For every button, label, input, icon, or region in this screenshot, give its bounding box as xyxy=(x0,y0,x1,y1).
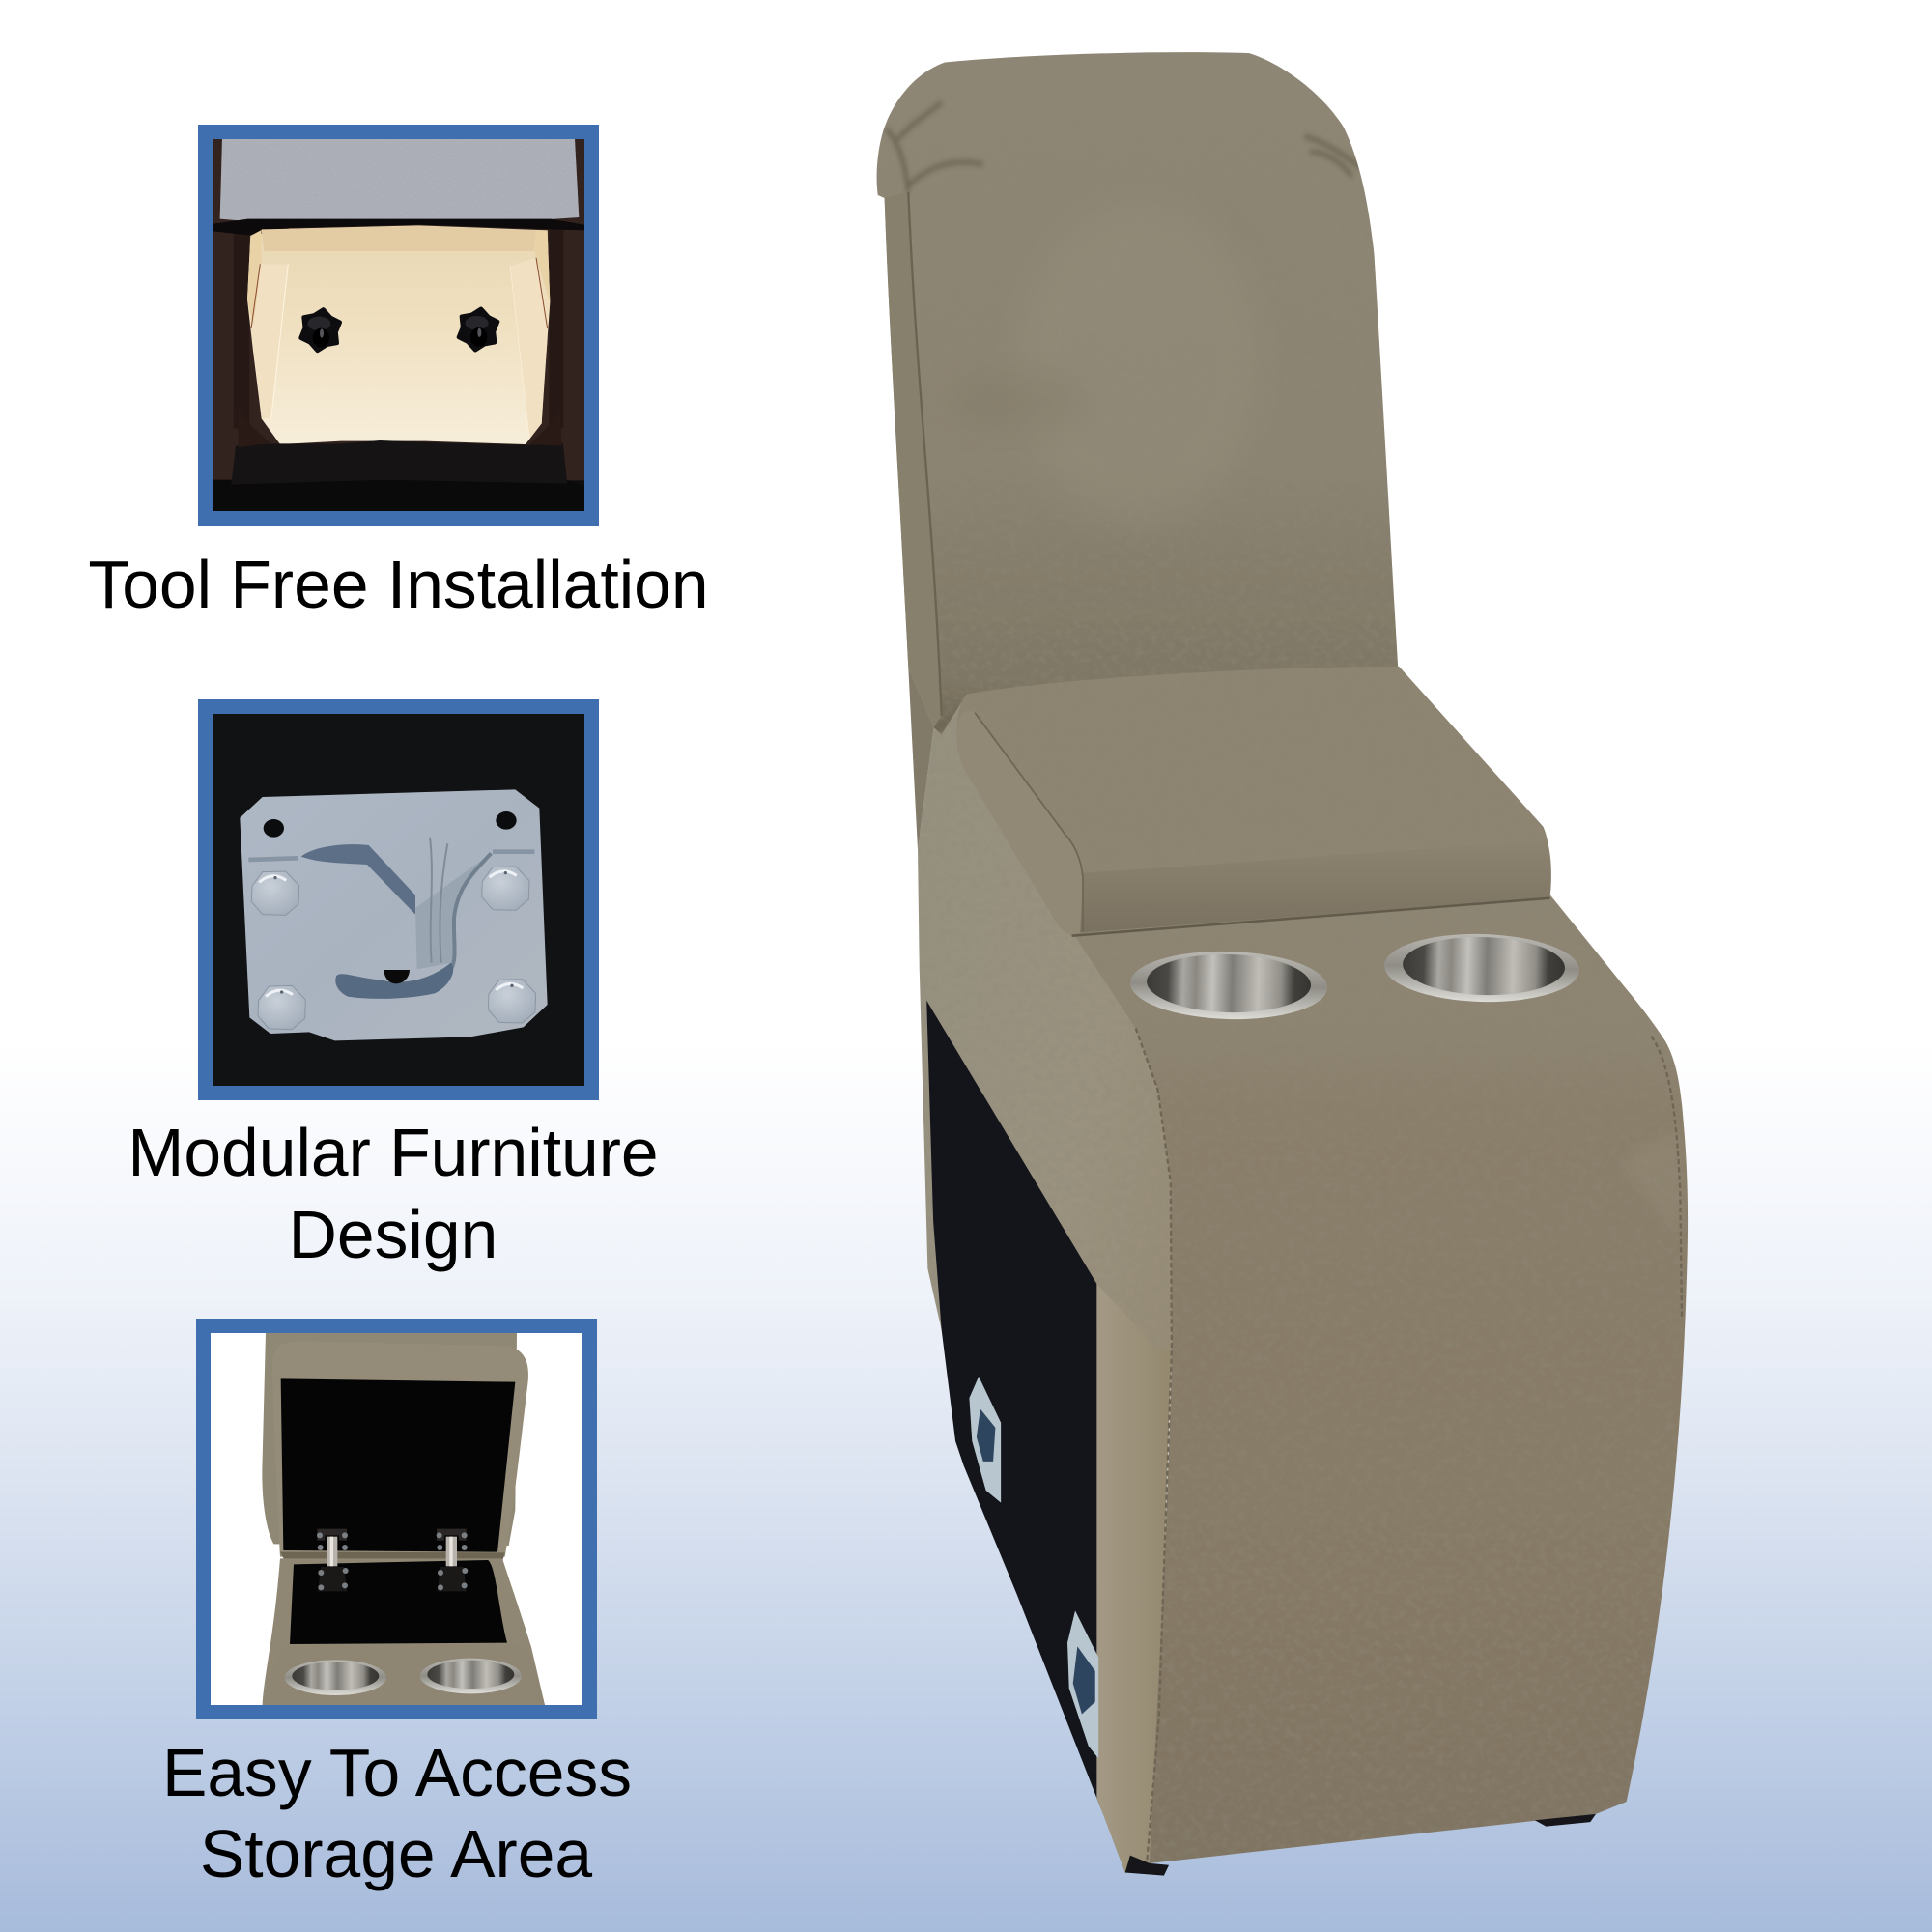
cup holder right xyxy=(1383,931,1580,1005)
panel: easy to access storage xyxy=(203,1325,589,1712)
chair side panel xyxy=(918,691,1172,1872)
photo: open storage compartment xyxy=(262,1333,545,1705)
rear sliver of backrest xyxy=(908,668,934,850)
feet xyxy=(1125,1814,1596,1876)
tan side lower band xyxy=(1096,1284,1172,1872)
mounting bracket lower xyxy=(1067,1610,1098,1758)
backrest side band, seam and wrinkles xyxy=(885,102,1360,727)
product photo: console chair xyxy=(877,52,1688,1876)
panel: modular furniture design xyxy=(205,707,591,1094)
chair leather shell xyxy=(877,52,1688,1876)
heading: easy to access storage area: Easy To Access xyxy=(162,1735,632,1810)
photo: bracket pocket with knobs xyxy=(213,139,584,511)
panel: tool free installation xyxy=(205,131,591,518)
infographic canvas xyxy=(89,52,1689,1891)
photo frame: storage xyxy=(203,1325,589,1712)
heading: modular furniture design: Modular Furniture xyxy=(128,1115,659,1190)
heading: tool free installation: Tool Free Installation xyxy=(88,547,709,622)
heading: easy to access storage area: Storage Area xyxy=(200,1816,592,1891)
seat cushion xyxy=(956,667,1551,936)
chair backrest xyxy=(877,52,1398,734)
black fabric rear panel xyxy=(926,1001,1104,1816)
mounting bracket upper xyxy=(969,1377,1001,1503)
photo frame: modular furniture xyxy=(205,707,591,1094)
heading: modular furniture design: Design xyxy=(289,1197,497,1272)
cup holder left xyxy=(1129,949,1328,1022)
front face with top surface xyxy=(1072,895,1688,1864)
photo: metal connector plate xyxy=(240,789,548,1040)
photo frame: tool free installation xyxy=(205,131,591,518)
